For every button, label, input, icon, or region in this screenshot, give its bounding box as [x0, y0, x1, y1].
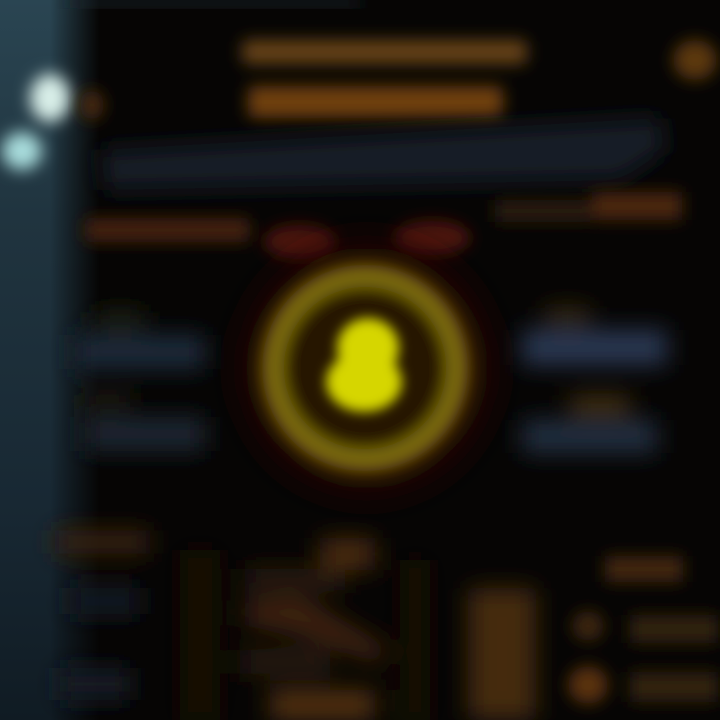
left sidebar strip	[0, 0, 360, 720]
left labels	[75, 312, 205, 451]
ring	[273, 276, 457, 460]
section heading left	[85, 218, 250, 242]
icon: sidebar glow spots	[2, 74, 104, 170]
bottom left column	[55, 530, 150, 700]
subtitle band	[100, 118, 665, 190]
bottom right list	[568, 556, 718, 704]
ring glow	[217, 218, 517, 518]
right labels	[522, 308, 667, 453]
central ring graphic	[217, 218, 517, 518]
icon: yellow centre	[326, 318, 402, 412]
bottom centre chart	[180, 538, 430, 720]
section heading right	[495, 192, 682, 222]
top right badge	[673, 40, 717, 80]
bottom centre bar	[468, 588, 536, 720]
red highlights above ring	[264, 221, 470, 259]
title	[242, 40, 527, 118]
